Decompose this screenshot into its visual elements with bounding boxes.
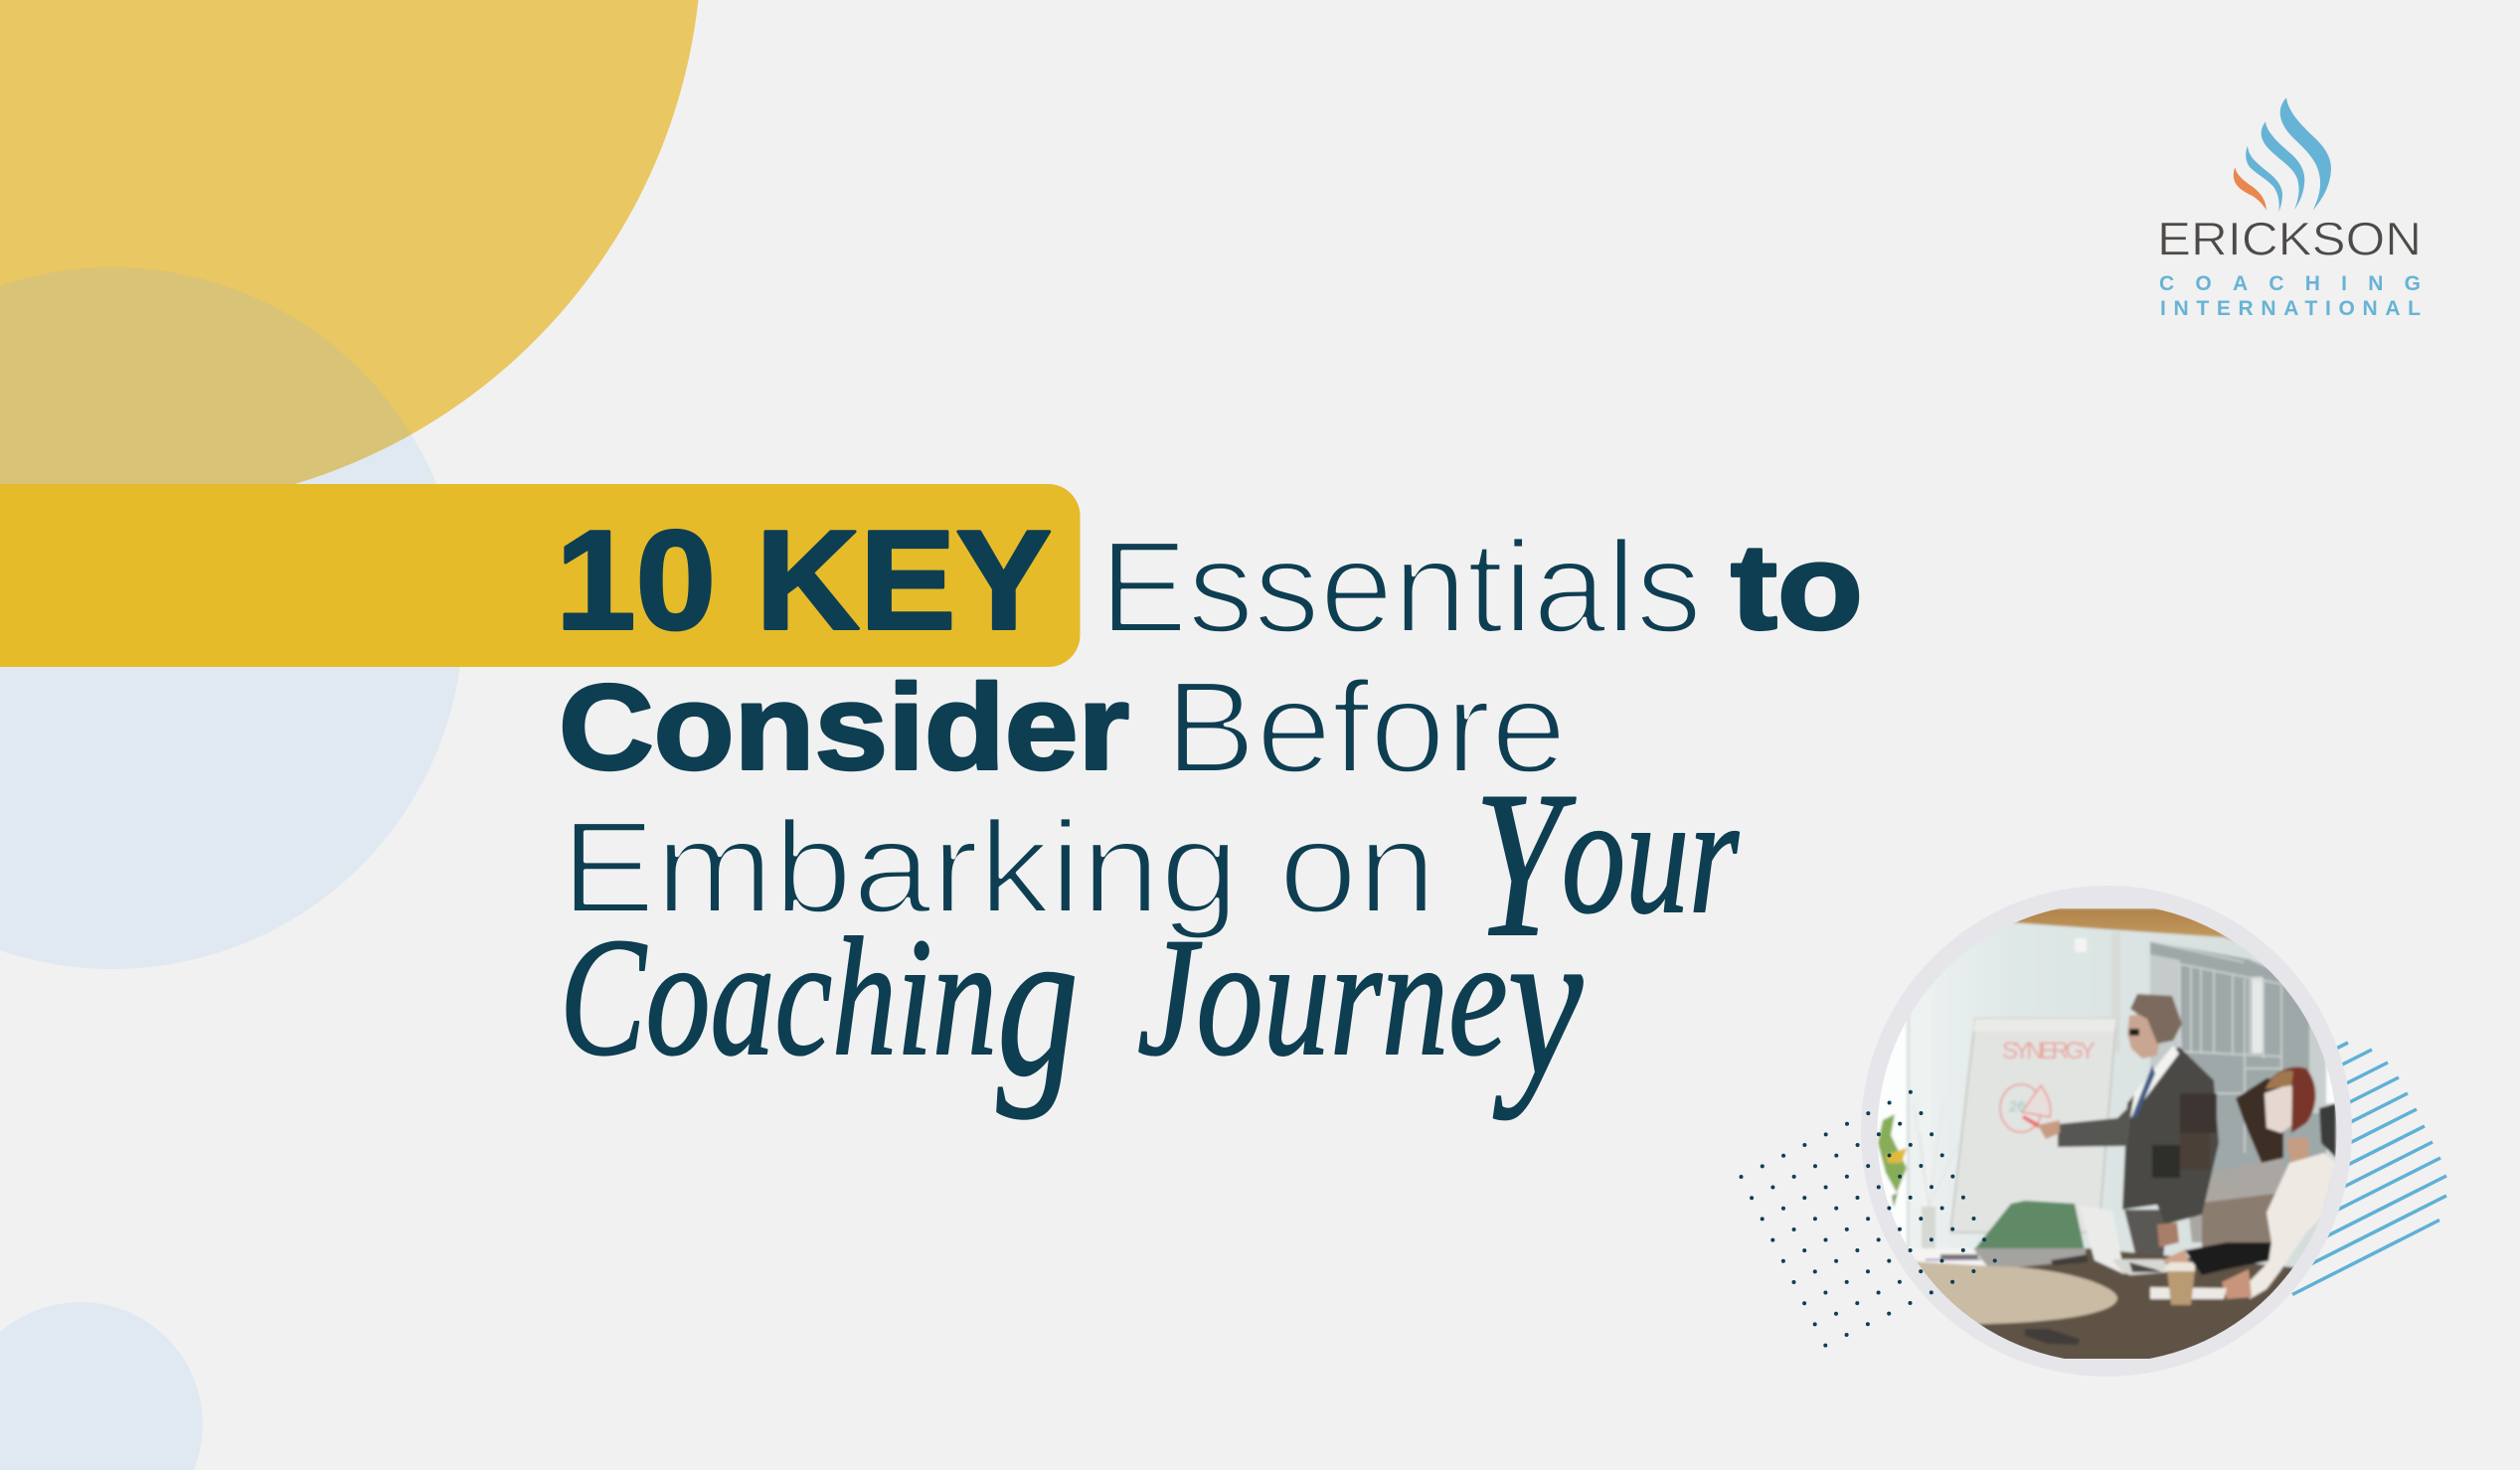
coffee cup (2165, 1262, 2195, 1305)
pie number: 26 (2009, 1098, 2026, 1115)
presenter hand and marker (2038, 1120, 2060, 1139)
glasses (2129, 1029, 2139, 1036)
photo ring (1861, 886, 2352, 1377)
logo flame mark (2234, 97, 2331, 212)
decorative circle bottom left (0, 1302, 203, 1470)
title line 3: Embarking on (561, 794, 1436, 940)
reflection panel (2185, 1155, 2283, 1242)
seated colleague (2162, 1078, 2283, 1275)
logo line: international: INTERNATIONAL (2160, 297, 2421, 320)
title line 2: Consider (559, 660, 1129, 795)
decorative circles top left (0, 0, 698, 969)
logo wordmark: ERICKSON (2157, 213, 2422, 264)
plant (1877, 1113, 1936, 1248)
title (556, 501, 1863, 1120)
colleague face (2265, 1083, 2294, 1133)
jacket (2122, 1047, 2219, 1225)
window (1877, 1016, 1911, 1248)
photo: team meeting with presenter at flip chart (1869, 908, 2346, 1362)
colleague hair (2266, 1067, 2315, 1133)
title line 3: our (1562, 761, 1740, 948)
hair (2130, 994, 2182, 1044)
presenter (2022, 994, 2219, 1262)
shirt and tie (2130, 1046, 2179, 1118)
foreground colleague (2222, 1067, 2336, 1299)
title line 4: y (1493, 883, 1583, 1120)
grip (2051, 1254, 2088, 1265)
ceiling (2012, 908, 2235, 942)
title line 2 (559, 654, 1567, 800)
title line 4: Journe (1137, 903, 1606, 1090)
laptop (2080, 1206, 2167, 1275)
title line 1: Essentials (1099, 514, 1702, 660)
remote (2025, 1329, 2080, 1345)
title line 3: Y (1474, 749, 1576, 980)
logo: Erickson Coaching International (2157, 97, 2422, 320)
pie sketch (2000, 1084, 2051, 1132)
wall (1911, 920, 2336, 1269)
dotted lattice (1740, 1090, 1997, 1348)
title line 3 (561, 749, 1740, 980)
blue diagonal stripes (2173, 1043, 2446, 1296)
title line 4: Coachin (560, 903, 1132, 1090)
face (2127, 1012, 2159, 1059)
chair (1975, 1201, 2085, 1250)
title line 2: Before (1165, 654, 1567, 800)
yellow highlight bar (0, 484, 1080, 667)
notebook (1940, 1254, 1978, 1259)
title line 1: 10 KEY (556, 501, 1052, 660)
title line 1: to (1731, 519, 1863, 654)
jacket window reflection (2180, 1093, 2217, 1133)
flip chart (1950, 1019, 2116, 1232)
sleeve (2058, 1103, 2132, 1147)
table (1909, 1246, 2294, 1359)
logo line: coaching: COACHING (2159, 272, 2421, 295)
title line 1 (556, 501, 1863, 660)
right side furniture (2319, 1103, 2336, 1158)
paper (2150, 1287, 2227, 1299)
glass partition (2111, 932, 2346, 1183)
title line 4: g (997, 883, 1079, 1120)
chart word: SYNERGY (2002, 1038, 2096, 1064)
wall sensor (2075, 938, 2087, 952)
title line 4 (560, 883, 1583, 1120)
